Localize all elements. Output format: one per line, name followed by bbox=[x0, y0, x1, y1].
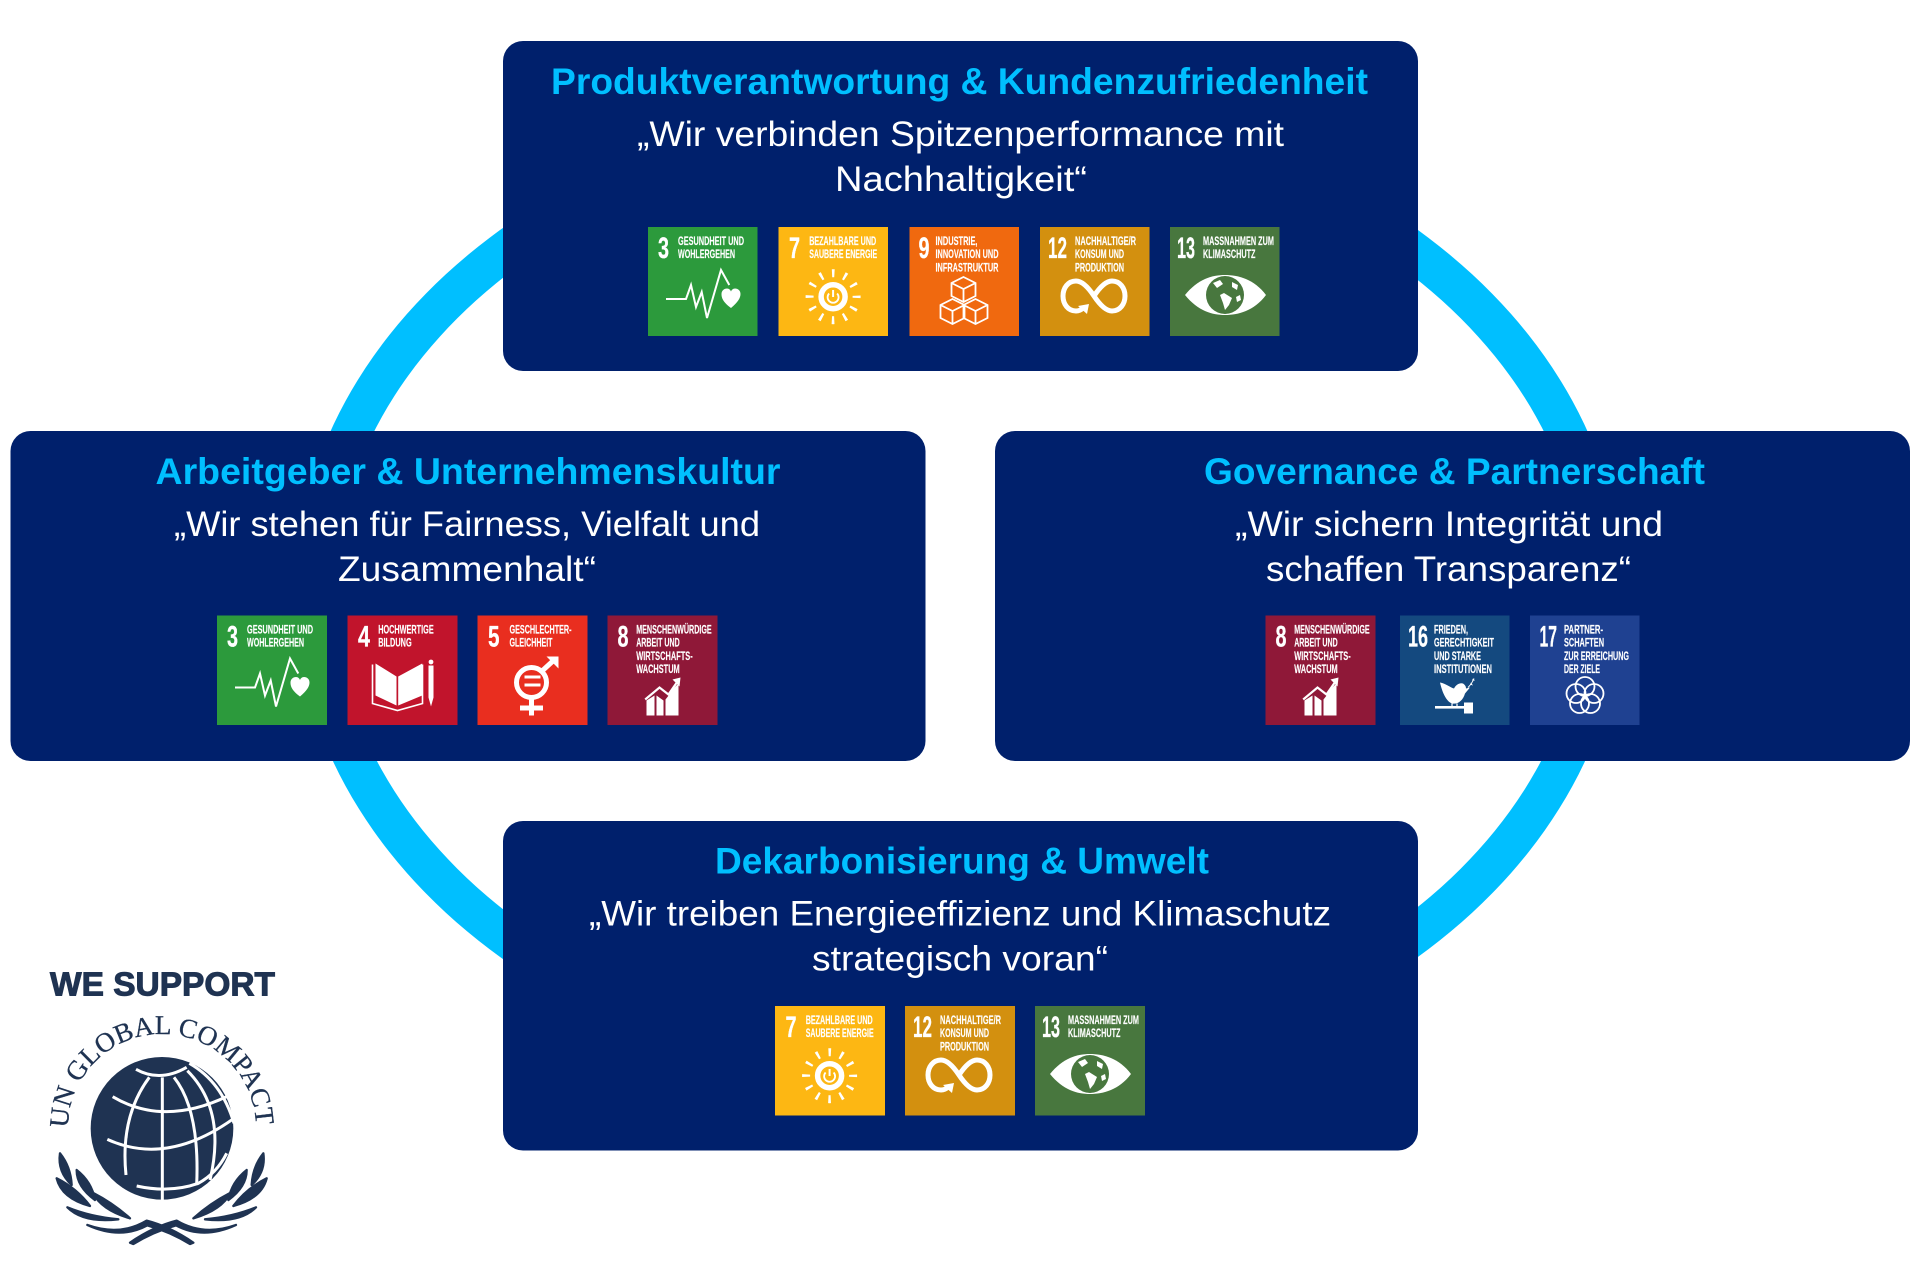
SDG tile 12: PRODUKTION bbox=[1075, 260, 1124, 274]
SDG tile 17: PARTNER- bbox=[1564, 622, 1603, 636]
SDG tile 7 bbox=[778, 227, 888, 336]
panel: Arbeitgeber bbox=[10, 431, 926, 761]
SDG tile 8: WIRTSCHAFTS- bbox=[1294, 649, 1351, 663]
SDG tile 5 bbox=[478, 616, 588, 725]
quote: „Wir verbinden Spitzenperformance mit bbox=[637, 114, 1284, 154]
SDG tile 8: WIRTSCHAFTS- bbox=[636, 649, 693, 663]
laurel right bbox=[130, 1153, 267, 1244]
SDG tile 13: KLIMASCHUTZ bbox=[1203, 247, 1256, 261]
SDG tile 16: GERECHTIGKEIT bbox=[1434, 636, 1494, 650]
SDG tile 9: 9 bbox=[918, 232, 930, 265]
SDG tile 8: MENSCHENWÜRDIGE bbox=[1294, 622, 1370, 636]
SDG tile 7: SAUBERE ENERGIE bbox=[806, 1026, 874, 1040]
SDG tile 16: UND STARKE bbox=[1434, 649, 1481, 663]
SDG tile 16: INSTITUTIONEN bbox=[1434, 662, 1492, 676]
SDG tile 5: GLEICHHEIT bbox=[510, 636, 553, 650]
SDG tile 13: 13 bbox=[1042, 1011, 1060, 1044]
SDG tile 17: ZUR ERREICHUNG bbox=[1564, 649, 1629, 663]
SDG tile 13: 13 bbox=[1177, 232, 1195, 265]
panel background bbox=[503, 821, 1418, 1150]
SDG tile 8: ARBEIT UND bbox=[636, 636, 680, 650]
SDG tile 5: 5 bbox=[488, 620, 500, 654]
SDG tile 17: 17 bbox=[1540, 620, 1557, 654]
SDG tile 8: WACHSTUM bbox=[636, 662, 680, 676]
un global compact arc text: UN GLOBAL COMPACT bbox=[50, 1016, 274, 1126]
quote: „Wir stehen für Fairness, Vielfalt und bbox=[174, 504, 760, 544]
SDG tile 7: 7 bbox=[789, 232, 800, 265]
panel: Governance bbox=[995, 431, 1910, 761]
SDG tile 3 bbox=[648, 227, 758, 336]
SDG tile 8 bbox=[608, 616, 718, 725]
SDG tile 4: 4 bbox=[358, 620, 370, 654]
SDG tile 3: GESUNDHEIT UND bbox=[678, 234, 744, 248]
SDG tile 3: GESUNDHEIT UND bbox=[247, 622, 313, 636]
SDG tile 3: WOHLERGEHEN bbox=[678, 247, 735, 261]
SDG tile 13: MASSNAHMEN ZUM bbox=[1203, 234, 1274, 248]
SDG tile 13: MASSNAHMEN ZUM bbox=[1068, 1013, 1139, 1027]
heading: Governance & Partnerschaft bbox=[1204, 450, 1706, 492]
quote: Zusammenhalt“ bbox=[338, 549, 596, 589]
SDG tile 8: WACHSTUM bbox=[1294, 662, 1338, 676]
SDG tile 3: 3 bbox=[227, 620, 238, 654]
laurel left bbox=[57, 1153, 193, 1244]
SDG tile 3: 3 bbox=[658, 232, 669, 265]
quote bbox=[174, 504, 760, 589]
SDG tile 12: 12 bbox=[913, 1011, 932, 1044]
SDG tile 4 bbox=[348, 616, 458, 725]
SDG tile 3: WOHLERGEHEN bbox=[247, 636, 304, 650]
quote bbox=[1235, 504, 1663, 589]
SDG tile 7 bbox=[775, 1006, 885, 1116]
logo: UN Global Compact bbox=[49, 966, 276, 1246]
panel: Dekarbonisierung bbox=[503, 821, 1418, 1150]
SDG tile 16 bbox=[1400, 616, 1510, 725]
SDG tile 13 bbox=[1035, 1006, 1145, 1116]
SDG tile 16: FRIEDEN, bbox=[1434, 622, 1468, 636]
SDG tile 4: BILDUNG bbox=[378, 636, 412, 650]
SDG tile 17: SCHAFTEN bbox=[1564, 636, 1604, 650]
globe bbox=[91, 1057, 234, 1202]
quote bbox=[589, 894, 1331, 978]
quote: „Wir treiben Energieeffizienz und Klimaschutz bbox=[589, 894, 1331, 934]
SDG tile 17 bbox=[1530, 616, 1640, 725]
SDG tile 5: GESCHLECHTER- bbox=[510, 622, 572, 636]
SDG tile 8: ARBEIT UND bbox=[1294, 636, 1338, 650]
heading: Dekarbonisierung & Umwelt bbox=[715, 840, 1209, 882]
SDG tile 12: NACHHALTIGE/R bbox=[1075, 234, 1136, 248]
SDG tile 8: MENSCHENWÜRDIGE bbox=[636, 622, 712, 636]
SDG tile 4: HOCHWERTIGE bbox=[378, 622, 434, 636]
SDG tile 12: PRODUKTION bbox=[940, 1039, 989, 1053]
panel background bbox=[10, 431, 926, 761]
we support label: WE SUPPORT bbox=[50, 966, 275, 1002]
SDG tile 8: 8 bbox=[1276, 620, 1286, 654]
SDG tile 9: INFRASTRUKTUR bbox=[936, 260, 999, 274]
SDG tile 17: DER ZIELE bbox=[1564, 662, 1600, 676]
SDG tile 7: BEZAHLBARE UND bbox=[809, 234, 876, 248]
SDG tile 9: INNOVATION UND bbox=[936, 247, 999, 261]
quote bbox=[637, 114, 1284, 199]
SDG tile 7: SAUBERE ENERGIE bbox=[809, 247, 877, 261]
SDG tile 3 bbox=[217, 616, 327, 725]
SDG tile 12: KONSUM UND bbox=[1075, 247, 1124, 261]
SDG tile 8 bbox=[1266, 616, 1376, 725]
SDG tile 12 bbox=[1040, 227, 1150, 336]
heading: Arbeitgeber & Unternehmenskultur bbox=[156, 450, 781, 492]
quote: strategisch voran“ bbox=[812, 938, 1108, 978]
SDG tile 8: 8 bbox=[618, 620, 628, 654]
SDG tile 12: KONSUM UND bbox=[940, 1026, 989, 1040]
SDG tile 12 bbox=[905, 1006, 1015, 1116]
SDG tile 13 bbox=[1170, 227, 1280, 336]
SDG tile 7: BEZAHLBARE UND bbox=[806, 1013, 873, 1027]
SDG tile 9: INDUSTRIE, bbox=[936, 234, 978, 248]
SDG tile 12: NACHHALTIGE/R bbox=[940, 1013, 1001, 1027]
quote: schaffen Transparenz“ bbox=[1266, 549, 1631, 589]
SDG tile 7: 7 bbox=[786, 1011, 796, 1044]
SDG tile 16: 16 bbox=[1408, 620, 1428, 654]
quote: Nachhaltigkeit“ bbox=[835, 159, 1087, 199]
panel background bbox=[503, 41, 1418, 371]
heading: Produktverantwortung & Kundenzufriedenheit bbox=[551, 60, 1369, 102]
quote: „Wir sichern Integrität und bbox=[1235, 504, 1663, 544]
panel background bbox=[995, 431, 1910, 761]
connecting ring bbox=[295, 90, 1623, 1096]
panel: Produktverantwortung bbox=[503, 41, 1418, 371]
SDG tile 12: 12 bbox=[1048, 232, 1067, 265]
SDG tile 13: KLIMASCHUTZ bbox=[1068, 1026, 1120, 1040]
SDG tile 9 bbox=[910, 227, 1019, 336]
